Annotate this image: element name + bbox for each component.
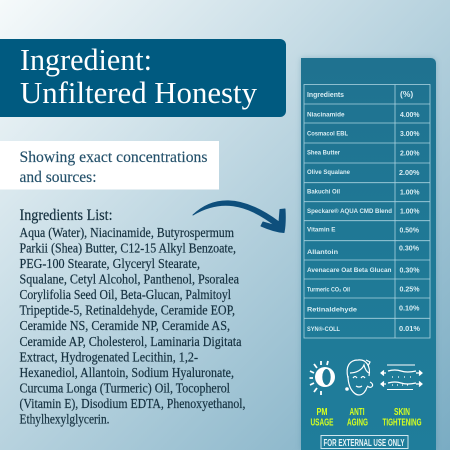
- table values: 0.25%: [400, 284, 420, 294]
- subtitle box: Showing exact concentrations: [20, 149, 208, 166]
- table values: 1.00%: [400, 206, 420, 216]
- ingredients list: Ceramide NS, Ceramide NP, Ceramide AS,: [20, 319, 230, 334]
- table values: 0.30%: [399, 244, 419, 252]
- title: Unfiltered Honesty: [20, 75, 257, 110]
- table names: Ingredients: [307, 92, 344, 99]
- table names: Allantoin: [307, 249, 338, 256]
- table grid: [304, 84, 430, 338]
- ingredients list: Hexanediol, Allantoin, Sodium Hyaluronate,: [20, 366, 234, 381]
- ingredients list: Ceramide AP, Cholesterol, Laminaria Digitata: [20, 335, 242, 350]
- table values: 0.01%: [399, 324, 420, 333]
- subtitle box: and sources:: [20, 169, 96, 186]
- ingredients list: Corylifolia Seed Oil, Beta-Glucan, Palmitoyl: [20, 288, 231, 303]
- ingredients list: Parkii (Shea) Butter, C12-15 Alkyl Benzoate,: [20, 242, 236, 256]
- usage labels: TIGHTENING: [382, 416, 422, 428]
- subtitle box: [0, 141, 219, 190]
- table names: Shea Butter: [307, 150, 340, 156]
- usage labels: SKIN: [394, 406, 410, 418]
- panel: product label: [301, 58, 436, 450]
- usage labels: [310, 406, 422, 428]
- ingredients list: Ingredients List:: [20, 207, 112, 224]
- title banner: [0, 39, 286, 117]
- table names: Vitamin E: [307, 226, 336, 234]
- ingredients list: [20, 207, 246, 428]
- icon: sun and moon: [310, 361, 335, 395]
- external use notice: [321, 436, 408, 449]
- usage labels: AGING: [347, 416, 368, 428]
- table values: 3.00%: [400, 129, 420, 138]
- table names: Olive Squalane: [307, 169, 350, 176]
- title: [20, 42, 257, 110]
- table values: 0.30%: [400, 266, 420, 274]
- table names: Cosmacol EBL: [307, 130, 348, 138]
- ingredients list: Ethylhexylglycerin.: [20, 412, 110, 428]
- ingredients list: Aqua (Water), Niacinamide, Butyrospermum: [20, 226, 234, 241]
- ingredients list: (Vitamin E), Disodium EDTA, Phenoxyethanol,: [20, 397, 246, 412]
- table values: 1.00%: [400, 188, 420, 196]
- ingredients list: Extract, Hydrogenated Lecithin, 1,2-: [20, 350, 198, 366]
- table values: (%): [400, 89, 413, 99]
- table values: 4.00%: [400, 110, 420, 119]
- table values: 2.00%: [400, 148, 420, 158]
- title: Ingredient:: [20, 42, 152, 77]
- icon: skin tightening: [381, 365, 422, 390]
- table names: [307, 92, 392, 333]
- table values: [399, 89, 420, 333]
- table values: 2.00%: [399, 168, 420, 177]
- ingredients list: PEG-100 Stearate, Glyceryl Stearate,: [20, 257, 200, 272]
- usage labels: ANTI: [350, 406, 365, 418]
- table values: 0.10%: [399, 304, 420, 312]
- table names: SYN®-COLL: [307, 325, 340, 333]
- table values: 0.50%: [400, 226, 419, 234]
- usage labels: PM: [316, 406, 328, 418]
- table names: Niacinamide: [307, 112, 345, 118]
- ingredients list: Squalane, Cetyl Alcohol, Panthenol, Psoralea: [20, 272, 240, 288]
- usage labels: USAGE: [310, 416, 334, 428]
- table names: Speckare® AQUA CMD Blend: [307, 207, 392, 215]
- icon: face: [346, 360, 373, 395]
- table names: Turmeric CO₂ Oil: [307, 286, 350, 294]
- arrow: [193, 201, 285, 232]
- ingredients list: Tripeptide-5, Retinaldehyde, Ceramide EOP,: [20, 304, 235, 318]
- table names: Avenacare Oat Beta Glucan: [307, 267, 392, 274]
- table names: Bakuchi Oil: [307, 188, 340, 196]
- table names: Retinaldehyde: [307, 306, 357, 314]
- ingredients list: Curcuma Longa (Turmeric) Oil, Tocopherol: [20, 382, 230, 396]
